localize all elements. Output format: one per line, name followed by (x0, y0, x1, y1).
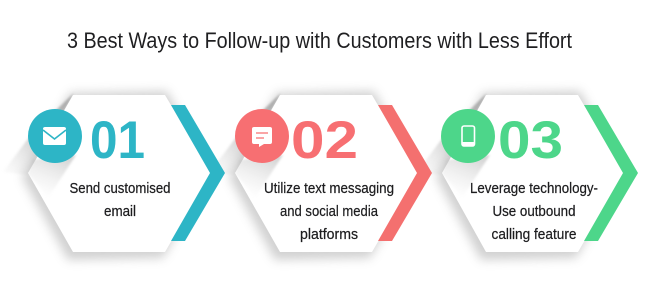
text 2 (264, 181, 394, 243)
icon circle 2 (235, 109, 289, 163)
hexagon 1 (28, 95, 211, 252)
hexagon shadow 3 (436, 91, 624, 260)
text 3: Use outbound (492, 204, 576, 220)
text 3 (470, 181, 598, 243)
hexagon shadow 2 (229, 91, 418, 260)
circle cast shadow 1 (28, 155, 76, 198)
text 2: and social media (280, 204, 379, 220)
number 03: 03 (498, 111, 563, 170)
text 1 (70, 181, 170, 220)
text 2: platforms (300, 227, 358, 243)
circle cast shadow 2 (235, 155, 283, 198)
icon circle 1 (28, 109, 82, 163)
circle cast shadow 3 (442, 155, 490, 198)
icon circle 3 (441, 109, 495, 163)
panel: step 3 (417, 91, 638, 260)
panel: step 1 (3, 91, 225, 260)
number 02: 02 (291, 111, 358, 170)
panel: step 2 (210, 91, 432, 260)
chevron 3 (584, 105, 638, 241)
icon: chat bubble (252, 127, 272, 147)
chevron 2 (378, 105, 432, 241)
text 1: Send customised (70, 181, 170, 197)
text 2: Utilize text messaging (264, 181, 394, 197)
chevron 1 (171, 105, 225, 241)
hexagon 3 (442, 95, 624, 252)
icon: envelope (43, 127, 66, 145)
long shadow 3 (417, 93, 487, 175)
number 01: 01 (90, 111, 145, 170)
text 1: email (104, 204, 136, 220)
long shadow 2 (210, 93, 281, 175)
title: 3 Best Ways to Follow-up with Customers with Less Effort (67, 28, 572, 53)
text 3: calling feature (492, 227, 576, 243)
icon: phone (462, 126, 474, 146)
text 3: Leverage technology- (470, 181, 598, 197)
hexagon 2 (235, 95, 418, 252)
long shadow 1 (3, 93, 74, 175)
hexagon shadow 1 (22, 91, 211, 260)
